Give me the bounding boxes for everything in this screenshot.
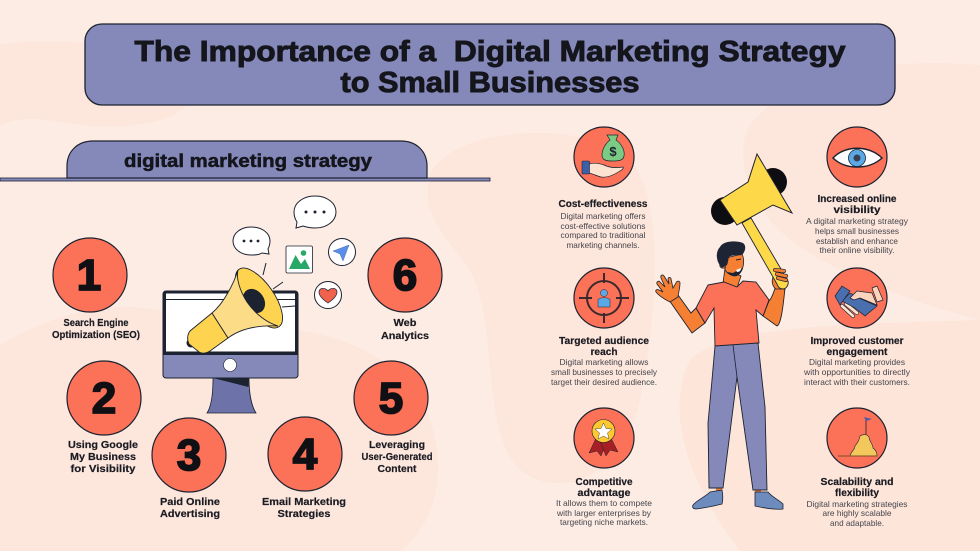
section heading tab [0,141,490,181]
strategy 5: User-Generated [362,451,432,463]
benefit: scalability and flexibility: Digital marketing strategies [806,499,908,509]
left hand [656,275,680,302]
palm behind pole [772,272,785,289]
benefit: increased online visibility: their online visibility. [820,245,894,255]
strategy 4: Strategies [278,508,331,520]
strategy 5: Content [378,463,417,475]
icon: handshake [827,268,887,328]
right arm [763,285,785,326]
megaphone [186,338,196,348]
benefit: increased online visibility: establish and enhance [816,236,898,246]
benefit: improved customer engagement: interact with their customers. [804,377,910,387]
shoes [693,490,723,509]
strategy 4: 4 [293,430,318,479]
title: The Importance of a Digital Marketing Strategy [134,36,846,68]
benefit: scalability and flexibility: are highly scalable [822,508,892,518]
benefit: improved customer engagement: Digital marketing provides [809,357,905,367]
icon: eye [827,127,887,187]
strategy 1: Search Engine [64,317,129,329]
monitor body [163,291,298,378]
neck [723,268,741,288]
strategy 6 [368,238,442,342]
icon: paper plane [328,238,356,266]
icon: speech bubble large [294,196,336,228]
strategy 1: Optimization (SEO) [52,329,140,341]
benefit: increased online visibility: visibility [834,205,881,216]
benefit: targeted audience reach: Digital marketing allows [560,357,648,367]
benefit: cost-effectiveness: Digital marketing offers [560,211,646,221]
benefit: targeted audience reach: target their desired audience. [551,377,657,387]
strategy 5 [354,361,432,475]
section heading text: digital marketing strategy [124,151,372,171]
benefit: competitive advantage: It allows them to compete [556,498,652,508]
benefit: targeted audience reach: reach [590,347,618,358]
pole [742,218,788,289]
ankles [716,486,761,494]
benefit: scalability and flexibility: and adaptable. [830,518,884,528]
strategy 2: for Visibility [70,463,136,475]
benefit: increased online visibility: Increased online [818,194,897,205]
strategy 5: Leveraging [369,439,425,451]
strategy 2: My Business [70,451,136,463]
benefit: competitive advantage: Competitive [576,477,633,488]
title banner [85,24,895,105]
benefit: cost-effectiveness: compared to traditional [560,230,646,240]
icon: heart [314,282,342,308]
benefit: cost-effectiveness: Cost-effectiveness [558,199,648,210]
title [134,36,846,99]
motion lines [263,263,295,307]
benefit: increased online visibility [806,127,909,255]
trousers [708,343,767,490]
shirt [696,281,769,347]
icon: flag on sand pile [827,408,887,468]
benefit: cost-effectiveness [558,127,648,250]
benefit: competitive advantage: advantage [578,488,631,499]
strategy 2 [67,361,141,475]
ear [720,262,726,268]
benefit: competitive advantage: with larger enterprises by [556,508,652,518]
benefit: cost-effectiveness: cost-effective solutions [560,221,646,231]
benefit: competitive advantage [556,408,652,527]
monitor stand [207,378,256,413]
strategy 4 [262,417,346,520]
title: to Small Businesses [340,67,640,99]
benefit: targeted audience reach [551,268,658,387]
icon: award ribbon [574,408,634,468]
benefit: competitive advantage: targeting niche markets. [560,517,648,527]
benefit: targeted audience reach: small businesses to precisely [551,367,658,377]
hair [717,241,745,268]
benefit: improved customer engagement: Improved customer [810,336,904,347]
benefit: increased online visibility: A digital marketing strategy [806,216,909,226]
strategy 6: Web [394,317,416,329]
strategy 1: 1 [77,251,101,300]
icon: speech bubble small [233,227,270,255]
icon: target with person [574,268,634,328]
benefit: improved customer engagement: with opportunities to directly [803,367,911,377]
strategy 2: Using Google [68,439,138,451]
strategy 3: Paid Online [160,496,220,508]
strategy 3 [152,418,226,520]
illustration: person holding megaphone sign [656,154,792,509]
icon: picture [286,246,312,273]
strategy 5: 5 [379,374,403,423]
left arm [669,295,705,333]
fingers on pole [775,270,786,280]
benefit: scalability and flexibility: Scalability and [820,477,894,488]
benefit: targeted audience reach: Targeted audience [559,336,649,347]
strategy 6: 6 [393,251,417,300]
strategy 6: Analytics [381,330,429,342]
strategy 1 [52,238,140,341]
icon: money bag in hand: $ [609,144,617,159]
megaphone sign [711,154,792,225]
strategy 3: Advertising [160,508,220,520]
icon: monitor with megaphone [163,261,298,413]
strategy 4: Email Marketing [262,496,346,508]
benefit: improved customer engagement: engagement [826,347,888,358]
strategy 3: 3 [177,431,201,480]
strategy 2: 2 [92,374,116,423]
benefit: cost-effectiveness: marketing channels. [566,240,640,250]
benefit: increased online visibility: helps small businesses [815,226,899,236]
benefit: scalability and flexibility [806,408,908,528]
jaw line and mouth [727,268,743,276]
face [725,254,744,276]
benefit: scalability and flexibility: flexibility [835,488,879,499]
benefit: improved customer engagement [803,268,911,387]
